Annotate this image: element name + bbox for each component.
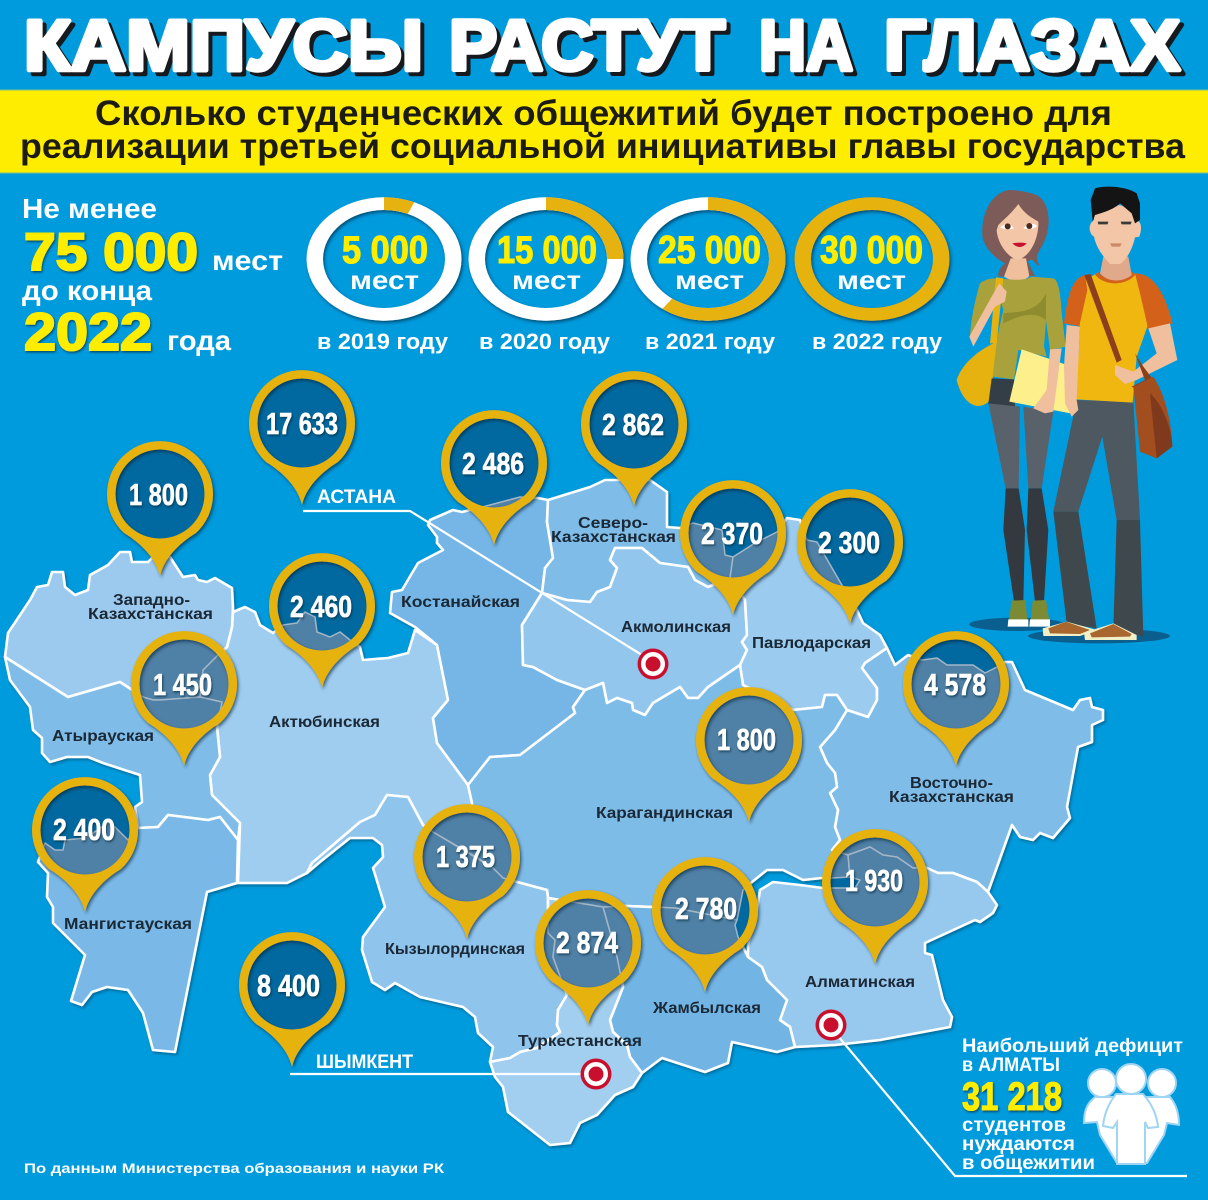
label: Шымкент: ШЫМКЕНТ: [316, 1052, 413, 1073]
pin: 1 800 Карагандинская: [695, 686, 806, 824]
title: КАМПУСЫ: [24, 7, 423, 86]
region: Карагандинская: [468, 665, 850, 920]
region: Костанайская: [390, 497, 585, 785]
pin: 2 862 Северо-Казахстанская: [580, 370, 691, 508]
total target text block: мест: [212, 245, 283, 276]
pin: 1 450 Атырауская: [130, 630, 241, 768]
callout: deficit in Almaty: Наибольший дефицит: [962, 1036, 1183, 1057]
pin: 1 930 Алматинская: [821, 828, 932, 966]
label: Жамбылская: Жамбылская: [652, 1000, 761, 1017]
callout: deficit in Almaty: [962, 1036, 1183, 1174]
pin: 2 874 Туркестанская: 2 874: [556, 925, 619, 960]
label: Актюбинская: Актюбинская: [269, 714, 380, 731]
label: Восточно-Казахстанская: [889, 775, 1014, 806]
map of Kazakhstan regions: [5, 480, 1103, 1145]
donut: 2022: в 2022 году: [812, 329, 943, 354]
pin: 4 578 Восточно-Казахстанская: 4 578: [924, 667, 986, 702]
pin: 1 800 Карагандинская: 1 800: [717, 722, 776, 757]
label: Северо-Казахстанская: [551, 515, 676, 546]
label: Астана: АСТАНА: [317, 487, 396, 508]
label: Павлодарская: Павлодарская: [752, 635, 871, 652]
donut: 2020: 15 000: [497, 229, 597, 272]
region: Мангистауская: [38, 815, 238, 1052]
pin: 2 400 Мангистауская: [31, 776, 142, 914]
region: Атырауская: [5, 657, 240, 840]
donut: 2021: 25 000: [658, 229, 761, 272]
pin: 2 874 Туркестанская: [534, 890, 645, 1028]
subtitle band: реализации третьей социальной инициативы главы государства: [20, 127, 1186, 166]
title: НА: [759, 7, 853, 86]
title: ГЛАЗАХ: [884, 7, 1180, 86]
pin: 1 375 Кызылординская: 1 375: [436, 839, 495, 874]
pin: 17 633 Астана: 17 633: [266, 406, 338, 441]
donut: 2020: [468, 197, 624, 354]
callout: deficit in Almaty: в АЛМАТЫ: [962, 1055, 1060, 1076]
pin: 2 400 Мангистауская: 2 400: [53, 812, 115, 847]
region: Туркестанская: [490, 898, 642, 1145]
city marker: Шымкент: [580, 1058, 612, 1090]
title: ГЛАЗАХ: [888, 11, 1184, 90]
pin: 2 780 Жамбылская: [651, 856, 762, 994]
region: Актюбинская: [200, 607, 478, 883]
total target text block: 2022: [24, 303, 152, 362]
label: Карагандинская: Карагандинская: [596, 805, 733, 822]
total target text block: до конца: [22, 275, 152, 306]
leader line: Алматы: [838, 1036, 1187, 1176]
city marker: Астана: [638, 648, 668, 680]
callout: deficit in Almaty: студентов: [962, 1115, 1066, 1136]
label: Акмолинская: Акмолинская: [621, 619, 731, 636]
pin: 2 370 Акмолинская: 2 370: [701, 516, 763, 551]
region: Жамбылская: [603, 906, 795, 1073]
pin: 17 633 Астана: [248, 370, 359, 507]
region: Павлодарская: [730, 518, 887, 717]
label: Кызылординская: Кызылординская: [385, 941, 525, 958]
label: Северо-Казахстанская: Казахстанская: [551, 529, 676, 546]
illustration: two students: [957, 187, 1177, 643]
pin: 2 300 Павлодарская: 2 300: [818, 525, 880, 560]
donut: 2022: [794, 197, 950, 354]
region: Акмолинская: [522, 548, 747, 715]
label: Восточно-Казахстанская: Восточно-: [910, 775, 993, 792]
title: КАМПУСЫ: [28, 11, 427, 90]
pin: 1 930 Алматинская: 1 930: [845, 863, 903, 898]
callout: deficit in Almaty: 31 218: [962, 1075, 1062, 1119]
region: Северо-Казахстанская: [542, 480, 733, 602]
pin: 1 450 Атырауская: 1 450: [153, 667, 212, 702]
region: Алматинская: [748, 847, 997, 1047]
leader line: Астана: [303, 511, 642, 655]
donut: 2021: в 2021 году: [645, 329, 776, 354]
donut: 2019: [306, 197, 462, 354]
pin: 2 460 Актюбинская: [268, 552, 379, 690]
pin: 4 578 Восточно-Казахстанская: [902, 630, 1013, 768]
man: [1043, 187, 1177, 640]
donut: 2022: мест: [837, 265, 906, 295]
title: РАСТУТ: [453, 11, 729, 90]
pin: 1 800 Западно-Казахстанская: [106, 440, 217, 578]
label: Атырауская: Атырауская: [52, 728, 154, 745]
icon: group of three students: [1084, 1064, 1179, 1164]
donut: 2020: мест: [512, 265, 581, 295]
donut: 2021: [630, 197, 786, 354]
label: Алматинская: Алматинская: [805, 974, 915, 991]
pin: 2 486 Костанайская: 2 486: [462, 446, 524, 481]
donut: 2022: 30 000: [820, 229, 923, 272]
pin: 2 862 Северо-Казахстанская: 2 862: [602, 407, 664, 442]
pin: 2 370 Акмолинская: [679, 480, 790, 618]
subtitle band: Сколько студенческих общежитий будет построено для: [95, 94, 1112, 133]
label: Костанайская: Костанайская: [401, 594, 520, 611]
label: Восточно-Казахстанская: Казахстанская: [889, 789, 1014, 806]
subtitle band: [0, 90, 1208, 173]
donut: 2019: в 2019 году: [317, 329, 449, 354]
total target text block: Не менее: [22, 193, 157, 224]
pin: 8 400 Шымкент: 8 400: [257, 968, 320, 1003]
label: Западно-Казахстанская: Казахстанская: [88, 606, 213, 623]
donut: 2020: в 2020 году: [479, 329, 611, 354]
donut: 2019: мест: [350, 265, 419, 295]
pin: 2 300 Павлодарская: [796, 488, 907, 626]
label: Северо-Казахстанская: Северо-: [578, 515, 648, 532]
callout: deficit in Almaty: нуждаются: [962, 1134, 1075, 1155]
total target text block: [22, 193, 283, 362]
pin: 1 800 Западно-Казахстанская: 1 800: [129, 477, 188, 512]
source note: По данным Министерства образования и науки РК: [24, 1160, 445, 1176]
woman: [957, 190, 1082, 627]
title: [24, 7, 1184, 90]
title: НА: [763, 11, 857, 90]
leader line: Шымкент: [290, 1073, 584, 1075]
region: Восточно-Казахстанская: [820, 648, 1103, 892]
donut: 2021: мест: [675, 265, 744, 295]
total target text block: года: [167, 325, 231, 356]
label: Туркестанская: Туркестанская: [518, 1033, 642, 1050]
pin: 2 486 Костанайская: [440, 410, 551, 548]
callout: deficit in Almaty: в общежитии: [962, 1153, 1095, 1174]
region: Кызылординская: [307, 795, 567, 1062]
pin: 2 780 Жамбылская: 2 780: [675, 891, 737, 926]
pin: 2 460 Актюбинская: 2 460: [290, 589, 352, 624]
total target text block: 75 000: [24, 223, 198, 282]
pin: 1 375 Кызылординская: [413, 804, 524, 941]
city marker: Алматы: [816, 1010, 846, 1040]
label: Западно-Казахстанская: [88, 592, 213, 623]
pin: 8 400 Шымкент: [239, 932, 345, 1067]
label: Западно-Казахстанская: Западно-: [113, 592, 190, 609]
label: Мангистауская: Мангистауская: [64, 916, 192, 933]
donut: 2019: 5 000: [342, 229, 428, 272]
title: РАСТУТ: [449, 7, 725, 86]
region: Западно-Казахстанская: [5, 552, 233, 700]
